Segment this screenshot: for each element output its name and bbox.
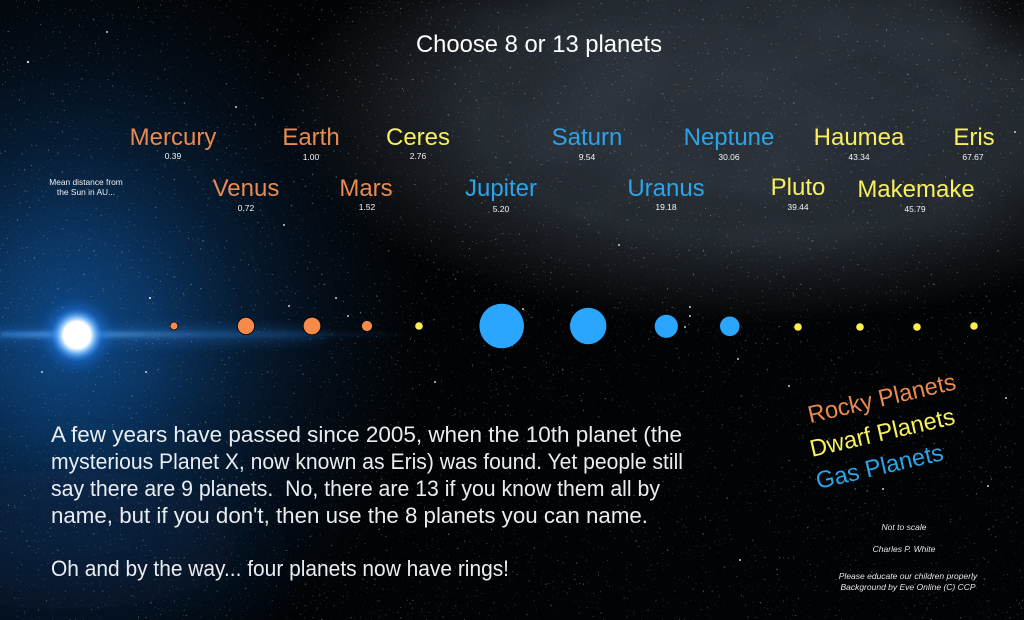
legend: Gas Planets [813,439,946,495]
planet: Saturn [570,308,606,344]
title: Choose 8 or 13 planets [416,31,662,58]
credits: Not to scale [882,522,927,532]
label: Pluto: Pluto [771,174,825,201]
label: Haumea: Haumea [814,124,905,151]
legend: Dwarf Planets [807,403,958,463]
credits [839,522,978,592]
planet: Neptune [720,316,740,336]
planet: Makemake [913,323,921,331]
planet: Pluto [794,323,802,331]
label: Neptune: Neptune [684,124,774,151]
label: Venus: Venus [213,175,279,202]
label: Neptune: 30.06 [718,152,740,162]
planet: Earth [303,317,321,335]
body text: name, but if you don't, then use the 8 planets you can name. [51,503,648,528]
label: Uranus: 19.18 [655,202,677,212]
body text: Oh and by the way... four planets now have rings! [51,556,509,581]
label: Pluto: 39.44 [787,202,809,212]
label: Ceres: Ceres [386,124,450,151]
label: Saturn: Saturn [552,124,622,151]
planet: Eris [970,322,978,330]
note: mean distance: the Sun in AU... [57,187,115,197]
label: Jupiter: 5.20 [493,204,510,214]
label: Saturn: 9.54 [579,152,596,162]
label: Makemake: Makemake [857,176,975,203]
label: Jupiter [465,175,537,214]
planet: Mercury [170,322,178,330]
note: mean distance [49,177,123,197]
label: Jupiter: Jupiter [465,175,537,202]
label: Eris: Eris [953,124,995,151]
body text: A few years have passed since 2005, when the 10th planet (the [51,422,682,447]
sun with lens flare [0,305,420,365]
label: Uranus: Uranus [627,175,705,202]
label: Ceres: 2.76 [410,151,427,161]
planet row [170,304,978,348]
planet: Ceres [415,322,423,330]
label: Earth: Earth [282,124,340,151]
body text [51,422,683,581]
body text: say there are 9 planets. No, there are 13 if you know them all by [51,476,660,501]
label: Haumea: 43.34 [848,152,870,162]
credits: Background by Eve Online (C) CCP [840,582,976,592]
credits: Please educate our children properly [839,571,978,581]
label: Eris: 67.67 [962,152,984,162]
label: Makemake: 45.79 [904,204,926,214]
planet: Jupiter [479,304,524,348]
legend [805,369,958,495]
label: Mars: 1.52 [359,202,376,212]
credits: Charles P. White [873,544,936,554]
label: Mercury: 0.39 [165,151,182,161]
planet: Haumea [856,323,864,331]
planet: Mars [362,320,372,332]
planet: Venus [237,317,255,335]
label: Venus: 0.72 [238,203,255,213]
body text: mysterious Planet X, now known as Eris) was found. Yet people still [51,449,683,474]
label: Mars: Mars [339,175,393,202]
note: mean distance: Mean distance from [49,177,123,187]
planet: Uranus [655,315,678,338]
label: Earth: 1.00 [303,152,320,162]
legend: Rocky Planets [805,369,958,429]
label: Mercury: Mercury [130,124,216,151]
